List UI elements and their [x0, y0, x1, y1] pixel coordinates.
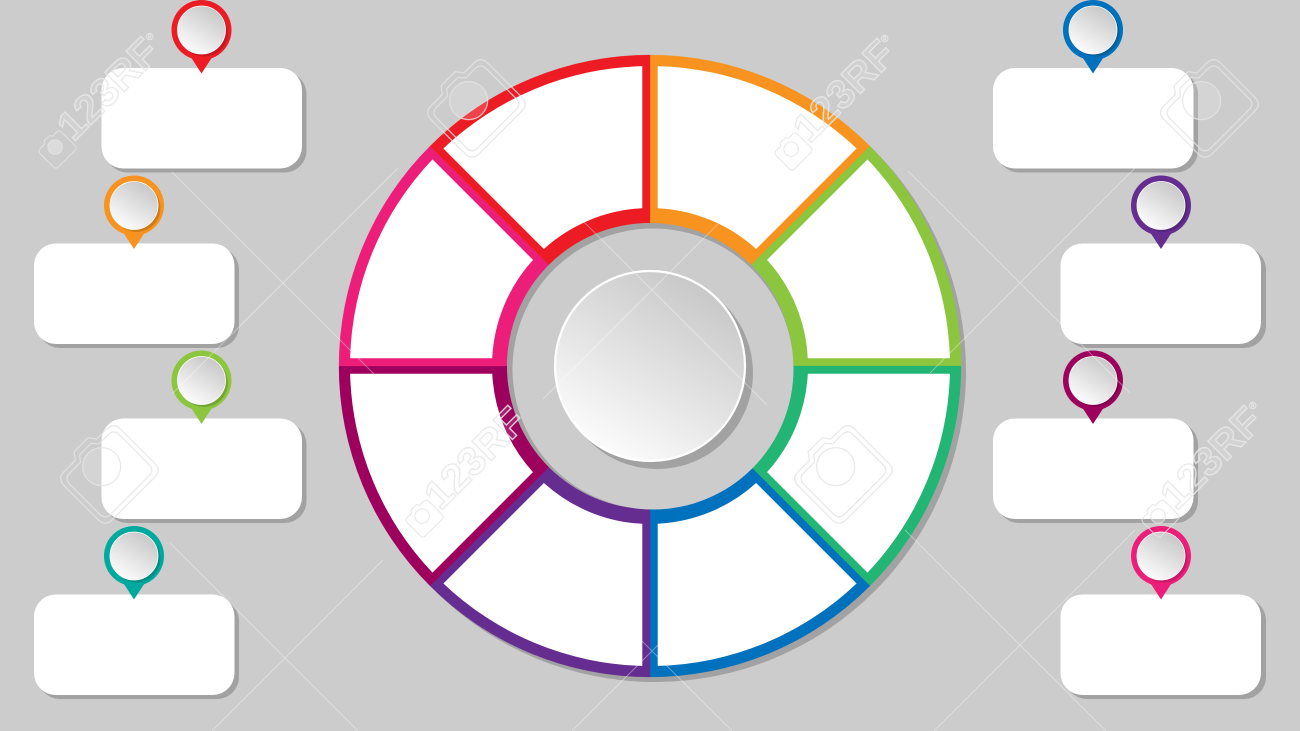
text box: left 4	[34, 594, 239, 699]
pin: red	[172, 0, 232, 74]
watermark: camera 1	[52, 417, 162, 527]
segment: orange	[650, 55, 870, 265]
watermark: camera 2	[419, 51, 529, 161]
segment: light green	[722, 146, 1025, 450]
pin: teal	[104, 526, 164, 600]
segment: red	[430, 0, 734, 294]
segment: green	[751, 366, 961, 586]
wheel drop shadow	[344, 60, 966, 682]
text box: left 3	[102, 418, 306, 523]
pin: purple	[1131, 176, 1191, 249]
text box: right 1	[993, 68, 1198, 172]
watermark: logo 2: ®	[881, 34, 889, 45]
watermark: logo 1: ®	[146, 32, 154, 43]
watermark: camera 3	[786, 417, 896, 527]
text box: right 3	[993, 418, 1198, 523]
watermark: logo 2: 123RF	[785, 32, 904, 151]
pin: light green	[172, 350, 232, 424]
text box: left 1	[102, 68, 306, 172]
pin: pink	[1131, 526, 1191, 600]
centre disc	[555, 271, 753, 469]
watermark: camera 4	[1152, 51, 1262, 161]
segment: blue	[566, 438, 870, 731]
text box: right 2	[1060, 244, 1266, 348]
pin: blue	[1063, 0, 1123, 74]
watermark: logo 4: ®	[1249, 401, 1257, 412]
watermark: logo 1: 123RF	[49, 30, 168, 149]
watermark: logo 4: 123RF	[1152, 399, 1271, 518]
watermark: logo 3: 123RF	[416, 399, 535, 518]
panel: wheel	[275, 0, 1025, 731]
segment: maroon	[275, 282, 578, 586]
text box: right 4	[1060, 594, 1266, 699]
pin: maroon	[1063, 350, 1123, 424]
pin: orange	[104, 176, 164, 249]
segment: purple	[430, 467, 650, 677]
segment: pink	[339, 146, 549, 366]
text box: left 2	[34, 244, 239, 348]
wheel hole with inner shadow	[507, 223, 794, 510]
